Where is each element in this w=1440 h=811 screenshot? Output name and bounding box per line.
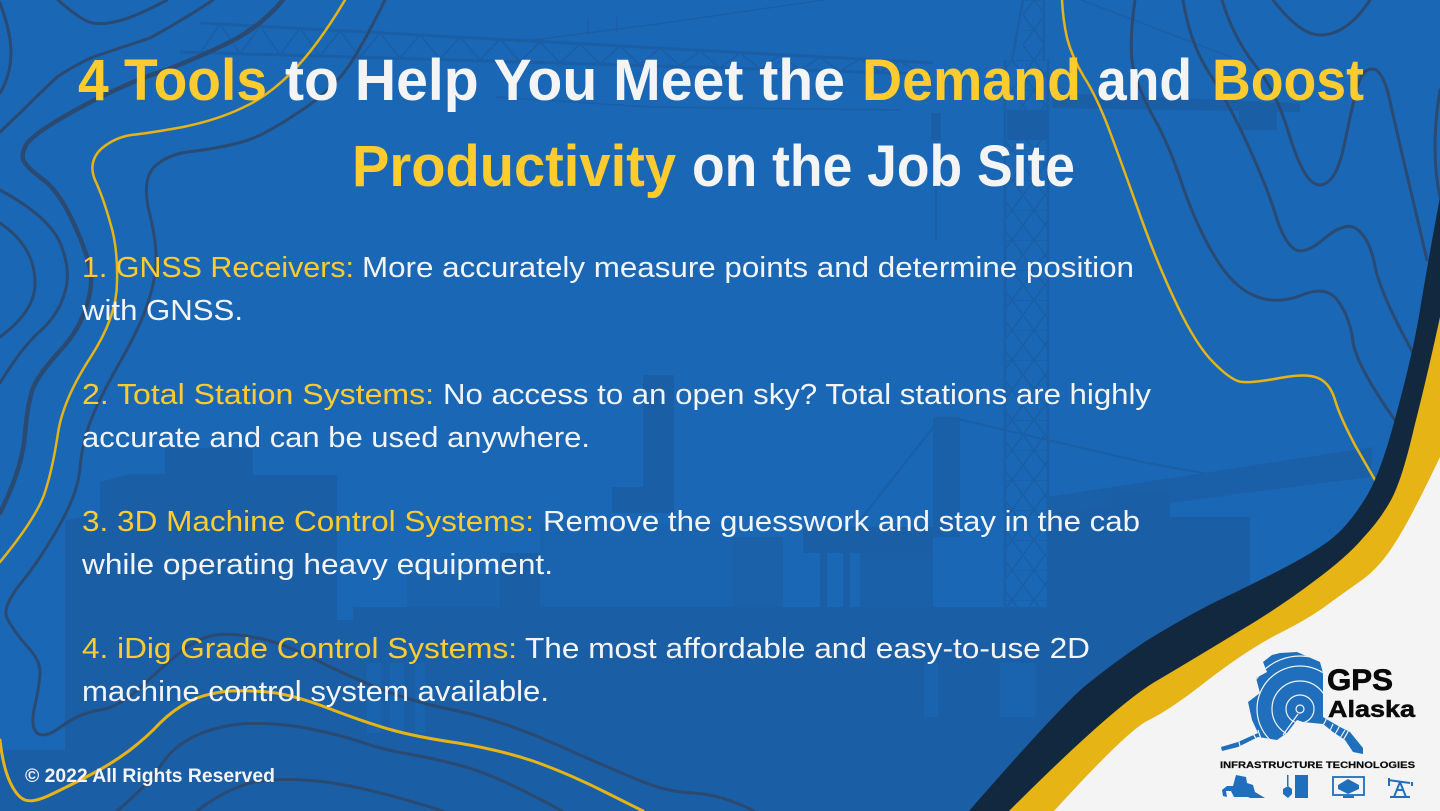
- item 4: iDig grade control systems: The most affordable and easy-to-use 2D: [525, 633, 1090, 665]
- item 3: 3D machine control systems: 3. 3D Machine Control Systems:: [82, 506, 534, 538]
- logo wordmark: Alaska: [1328, 696, 1415, 722]
- logo wordmark: GPS: [1327, 664, 1393, 697]
- item 2: total station systems: 2. Total Station Systems:: [82, 379, 434, 411]
- logo wordmark: [1220, 664, 1415, 771]
- title: and: [1097, 48, 1192, 113]
- item 1: GNSS receivers: with GNSS.: [81, 295, 243, 327]
- title: Demand: [862, 48, 1081, 113]
- title: Boost: [1212, 48, 1364, 113]
- title: 4 Tools: [78, 48, 267, 113]
- item 4: iDig grade control systems: [82, 633, 1090, 708]
- item 1: GNSS receivers: More accurately measure points and determine position: [362, 252, 1134, 284]
- item 2: total station systems: accurate and can be used anywhere.: [82, 422, 590, 454]
- item 1: GNSS receivers: [81, 252, 1134, 327]
- item 4: iDig grade control systems: machine control system available.: [82, 676, 549, 708]
- icon: dozer: [1222, 775, 1265, 798]
- item 1: GNSS receivers: 1. GNSS Receivers:: [82, 252, 354, 284]
- title: on the Job Site: [692, 134, 1075, 199]
- icon: total station: [1283, 775, 1308, 798]
- icon: monitor: [1333, 777, 1364, 798]
- corner wave bands: [969, 197, 1440, 811]
- icon: Alaska map with signal rings: [1221, 652, 1363, 754]
- title: Productivity: [352, 134, 676, 199]
- title: [78, 48, 1364, 199]
- item 3: 3D machine control systems: [81, 506, 1140, 581]
- GPS Alaska logo: [1215, 648, 1415, 798]
- item 2: total station systems: [82, 379, 1152, 454]
- item 3: 3D machine control systems: Remove the guesswork and stay in the cab: [543, 506, 1140, 538]
- item 3: 3D machine control systems: while operating heavy equipment.: [81, 549, 553, 581]
- icon: oil pump: [1388, 778, 1412, 797]
- item 2: total station systems: No access to an open sky? Total stations are highly: [443, 379, 1152, 411]
- logo wordmark: INFRASTRUCTURE TECHNOLOGIES: [1220, 760, 1415, 771]
- item 4: iDig grade control systems: 4. iDig Grade Control Systems:: [82, 633, 517, 665]
- title: to Help You Meet the: [285, 48, 845, 113]
- tools list: [81, 252, 1152, 708]
- copyright footer: © 2022 All Rights Reserved: [25, 766, 275, 787]
